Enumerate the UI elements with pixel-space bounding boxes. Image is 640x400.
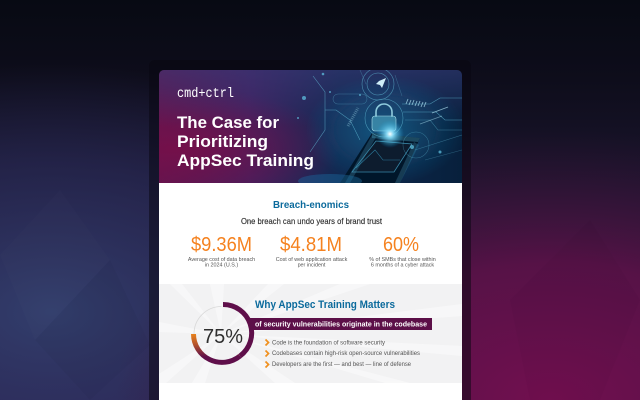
- icon: chevron: [266, 340, 268, 346]
- stat: average breach cost: Average cost of data breach: [188, 257, 255, 263]
- subheading: One breach can undo years of brand trust: [241, 216, 383, 226]
- bullet list: [266, 340, 420, 368]
- stat: average breach cost: in 2024 (U.S.): [205, 262, 238, 268]
- bullet list: Developers are the first — and best — line of defense: [272, 362, 412, 368]
- stat: average breach cost: [188, 234, 255, 268]
- bullet list: Codebases contain high-risk open-source vulnerabilities: [272, 351, 420, 357]
- donut chart: 75%: 75%: [203, 326, 243, 348]
- stat: web application attack cost: [276, 234, 348, 268]
- heading: Why AppSec Training Matters: [255, 299, 395, 311]
- stat: average breach cost: $9.36M: [191, 234, 252, 256]
- panel: header banner: [159, 68, 465, 188]
- callout banner: of security vulnerabilities originate in the codebase: [255, 320, 427, 328]
- stat: web application attack cost: per incident: [298, 262, 326, 268]
- device frame: [149, 60, 471, 400]
- panel: why AppSec training matters: [159, 284, 462, 383]
- icon: chevron: [266, 362, 268, 368]
- donut chart: 75%: [194, 304, 252, 362]
- stat: web application attack cost: $4.81M: [280, 234, 342, 256]
- title: [177, 113, 314, 170]
- heading: Breach-enomics: [273, 199, 349, 211]
- stat: SMB closures: % of SMBs that close within: [369, 257, 436, 263]
- stat: web application attack cost: Cost of web application attack: [276, 257, 348, 263]
- panel: breach-enomics: [188, 199, 436, 268]
- stat: SMB closures: 60%: [383, 234, 419, 256]
- document page: [159, 100, 462, 400]
- logo: cmd+ctrl: [177, 86, 234, 102]
- icon: circuit and padlock artwork: [297, 68, 465, 188]
- bullet list: Code is the foundation of software security: [272, 340, 385, 346]
- stat: SMB closures: [369, 234, 436, 268]
- stat: SMB closures: 6 months of a cyber attack: [371, 262, 434, 268]
- title: Prioritizing: [177, 132, 268, 151]
- title: The Case for: [177, 113, 280, 132]
- icon: chevron: [266, 350, 268, 356]
- title: AppSec Training: [177, 151, 314, 170]
